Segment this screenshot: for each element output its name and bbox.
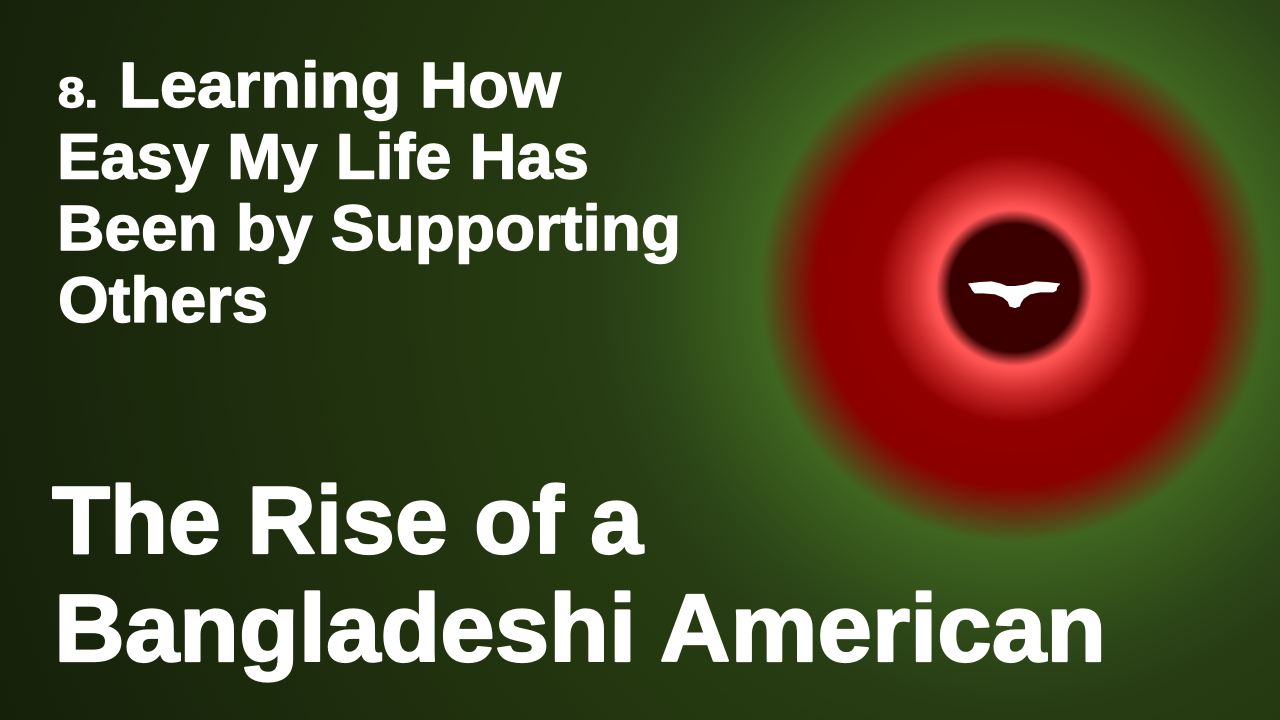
icon: white soaring bird	[969, 282, 1059, 307]
chapter title line 2: Easy My Life Has	[57, 120, 589, 192]
chapter title line 4: Others	[58, 264, 268, 336]
heading: main title	[52, 467, 1106, 682]
chapter title line 1: Learning How	[119, 49, 561, 121]
chapter number: 8.	[58, 69, 98, 117]
heading: chapter title	[57, 49, 681, 336]
main title line 1: The Rise of a	[52, 467, 644, 574]
main title line 2: Bangladeshi American	[54, 575, 1106, 682]
chapter title line 3: Been by Supporting	[57, 192, 681, 264]
